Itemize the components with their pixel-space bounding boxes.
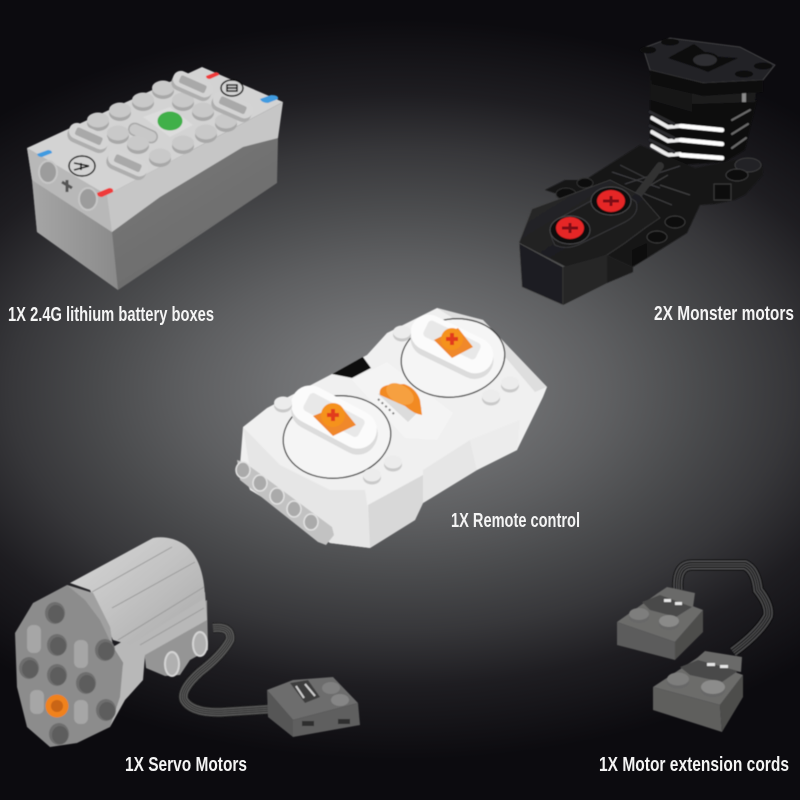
remote black port: [332, 357, 371, 378]
motor tower: [650, 75, 757, 165]
remote centre switch: [352, 362, 453, 440]
servo holes: [19, 602, 116, 745]
servo cable: [183, 628, 272, 712]
product: extension cord: [617, 565, 768, 732]
cord plug lower: [653, 651, 743, 732]
servo body: [70, 537, 205, 645]
motor cooling fins: [650, 110, 750, 158]
cord plug upper: [617, 587, 703, 660]
servo connector: [267, 677, 360, 737]
caption: battery box: 1X 2.4G lithium battery boxes: [8, 304, 214, 326]
battery button: [158, 112, 182, 130]
remote studs: [274, 326, 519, 484]
remote connector strip: [236, 460, 334, 545]
caption: remote control: 1X Remote control: [451, 510, 580, 532]
product: battery box: [27, 67, 283, 290]
caption: servo motors: 1X Servo Motors: [125, 754, 247, 776]
battery axle holes: [39, 161, 97, 210]
cord wire: [678, 565, 768, 652]
motor rear flange: [660, 158, 763, 218]
product: remote control: [236, 308, 547, 548]
motor top plate: [640, 38, 775, 96]
motor arm: [545, 145, 713, 267]
product: servo motor: [15, 537, 360, 747]
remote right dial: [396, 309, 510, 404]
battery LEDs: [37, 72, 278, 197]
battery top: studs: [65, 68, 255, 183]
product: monster motor: [519, 38, 775, 305]
servo lower housing: [110, 592, 207, 727]
motor front block: [519, 180, 685, 305]
remote left dial: [278, 379, 396, 485]
servo orange axle: [46, 694, 68, 718]
remote body: [240, 308, 547, 548]
servo lugs: [143, 600, 208, 676]
servo front face: [15, 585, 123, 747]
battery label B: [221, 80, 243, 96]
motor red screws: [550, 187, 631, 244]
battery label A: [69, 156, 95, 176]
